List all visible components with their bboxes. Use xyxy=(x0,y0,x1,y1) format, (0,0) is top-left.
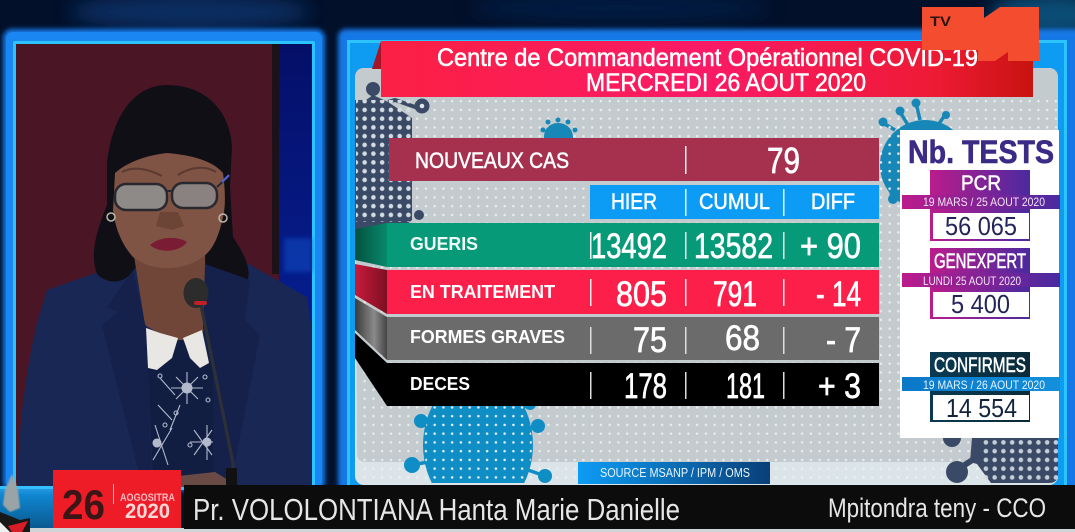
embroidery xyxy=(153,372,213,465)
table header: HIER xyxy=(611,189,657,214)
row: en traitement: EN TRAITEMENT xyxy=(410,282,555,302)
row: nouveaux cas: 79 xyxy=(767,140,800,181)
row: deces xyxy=(355,333,879,406)
card: GENEXPERT: 5 400 xyxy=(951,289,1010,319)
row: formes graves: 75 xyxy=(633,321,667,360)
hair xyxy=(94,85,249,284)
microphone xyxy=(201,305,233,482)
title text: MERCREDI 26 AOUT 2020 xyxy=(586,69,866,97)
row: deces: + 3 xyxy=(818,367,861,406)
date box: 2020 xyxy=(125,500,170,523)
date box xyxy=(53,470,181,528)
panel: video frame xyxy=(3,29,325,491)
card: GENEXPERT: GENEXPERT xyxy=(934,250,1026,273)
card: PCR: PCR xyxy=(961,172,1001,195)
icon: blue virus right xyxy=(878,98,970,210)
row: formes graves: 68 xyxy=(725,319,760,358)
logo: TV M: TV xyxy=(930,13,952,29)
panel: infographic frame xyxy=(338,29,1075,491)
card: GENEXPERT xyxy=(902,248,1060,319)
row: en traitement: 791 xyxy=(713,275,757,314)
card: PCR: 19 MARS / 25 AOUT 2020 xyxy=(923,195,1045,209)
icon: small blue virus xyxy=(540,118,578,138)
logo: TV M xyxy=(922,7,1039,61)
row: formes graves: FORMES GRAVES xyxy=(410,327,565,347)
row: nouveaux cas: NOUVEAUX CAS xyxy=(415,148,569,173)
hand xyxy=(176,472,228,487)
row: en traitement: 805 xyxy=(616,275,667,314)
glasses xyxy=(115,184,167,210)
card: CONFIRMES: 14 554 xyxy=(946,393,1017,423)
row: en traitement: - 14 xyxy=(816,275,861,314)
title banner xyxy=(372,41,1033,97)
date box: AOGOSITRA xyxy=(120,492,175,504)
row: nouveaux cas xyxy=(389,138,879,181)
speaker figure xyxy=(17,85,312,487)
speaker name: Pr. VOLOLONTIANA Hanta Marie Danielle xyxy=(193,492,680,527)
neck xyxy=(133,250,206,345)
row: formes graves: - 7 xyxy=(826,321,861,360)
row: deces: 181 xyxy=(726,367,765,406)
card: CONFIRMES: CONFIRMES xyxy=(934,354,1026,377)
row: gueris xyxy=(355,223,879,267)
heading: Nb. TESTS: Nb. TESTS xyxy=(908,134,1054,170)
card: GENEXPERT: LUNDI 25 AOUT 2020 xyxy=(923,274,1021,288)
panel: grey background board xyxy=(355,68,1058,485)
title text xyxy=(437,44,978,97)
lower third bar xyxy=(0,485,1075,532)
panel: tests xyxy=(900,130,1060,438)
row: deces: 178 xyxy=(624,367,667,406)
card: CONFIRMES xyxy=(902,352,1060,423)
row: deces: DECES xyxy=(410,374,470,394)
icon: dark virus bottom right xyxy=(943,429,1058,483)
face xyxy=(113,153,225,268)
source tag: SOURCE MSANP / IPM / OMS xyxy=(600,465,750,480)
left lower strip xyxy=(0,486,55,528)
row: formes graves xyxy=(355,298,879,360)
row: gueris: + 90 xyxy=(800,227,861,266)
title text: Centre de Commandement Opérationnel COVID-19 xyxy=(437,44,978,72)
icon: large blue virus xyxy=(404,406,552,483)
table header xyxy=(590,185,879,219)
jacket xyxy=(17,263,312,487)
row: gueris: GUERIS xyxy=(410,234,478,254)
white collar xyxy=(146,328,209,370)
earrings xyxy=(107,213,115,221)
panel: speaker video xyxy=(16,44,312,487)
card: PCR: 56 065 xyxy=(945,211,1017,241)
corner logo fragment xyxy=(0,474,30,532)
row: gueris: 13582 xyxy=(694,227,773,266)
blouse xyxy=(148,340,213,478)
lapels xyxy=(102,270,152,478)
nose and lips xyxy=(156,212,184,230)
row: en traitement xyxy=(355,264,879,314)
date box: 26 xyxy=(62,481,105,528)
card: CONFIRMES: 19 MARS / 26 AOUT 2020 xyxy=(923,378,1045,392)
icon: dark virus top left xyxy=(355,82,430,232)
table header: CUMUL xyxy=(699,189,770,214)
card: PCR xyxy=(902,170,1060,241)
source tag xyxy=(578,462,770,484)
row: gueris: 13492 xyxy=(591,227,667,266)
table header: DIFF xyxy=(811,189,855,214)
